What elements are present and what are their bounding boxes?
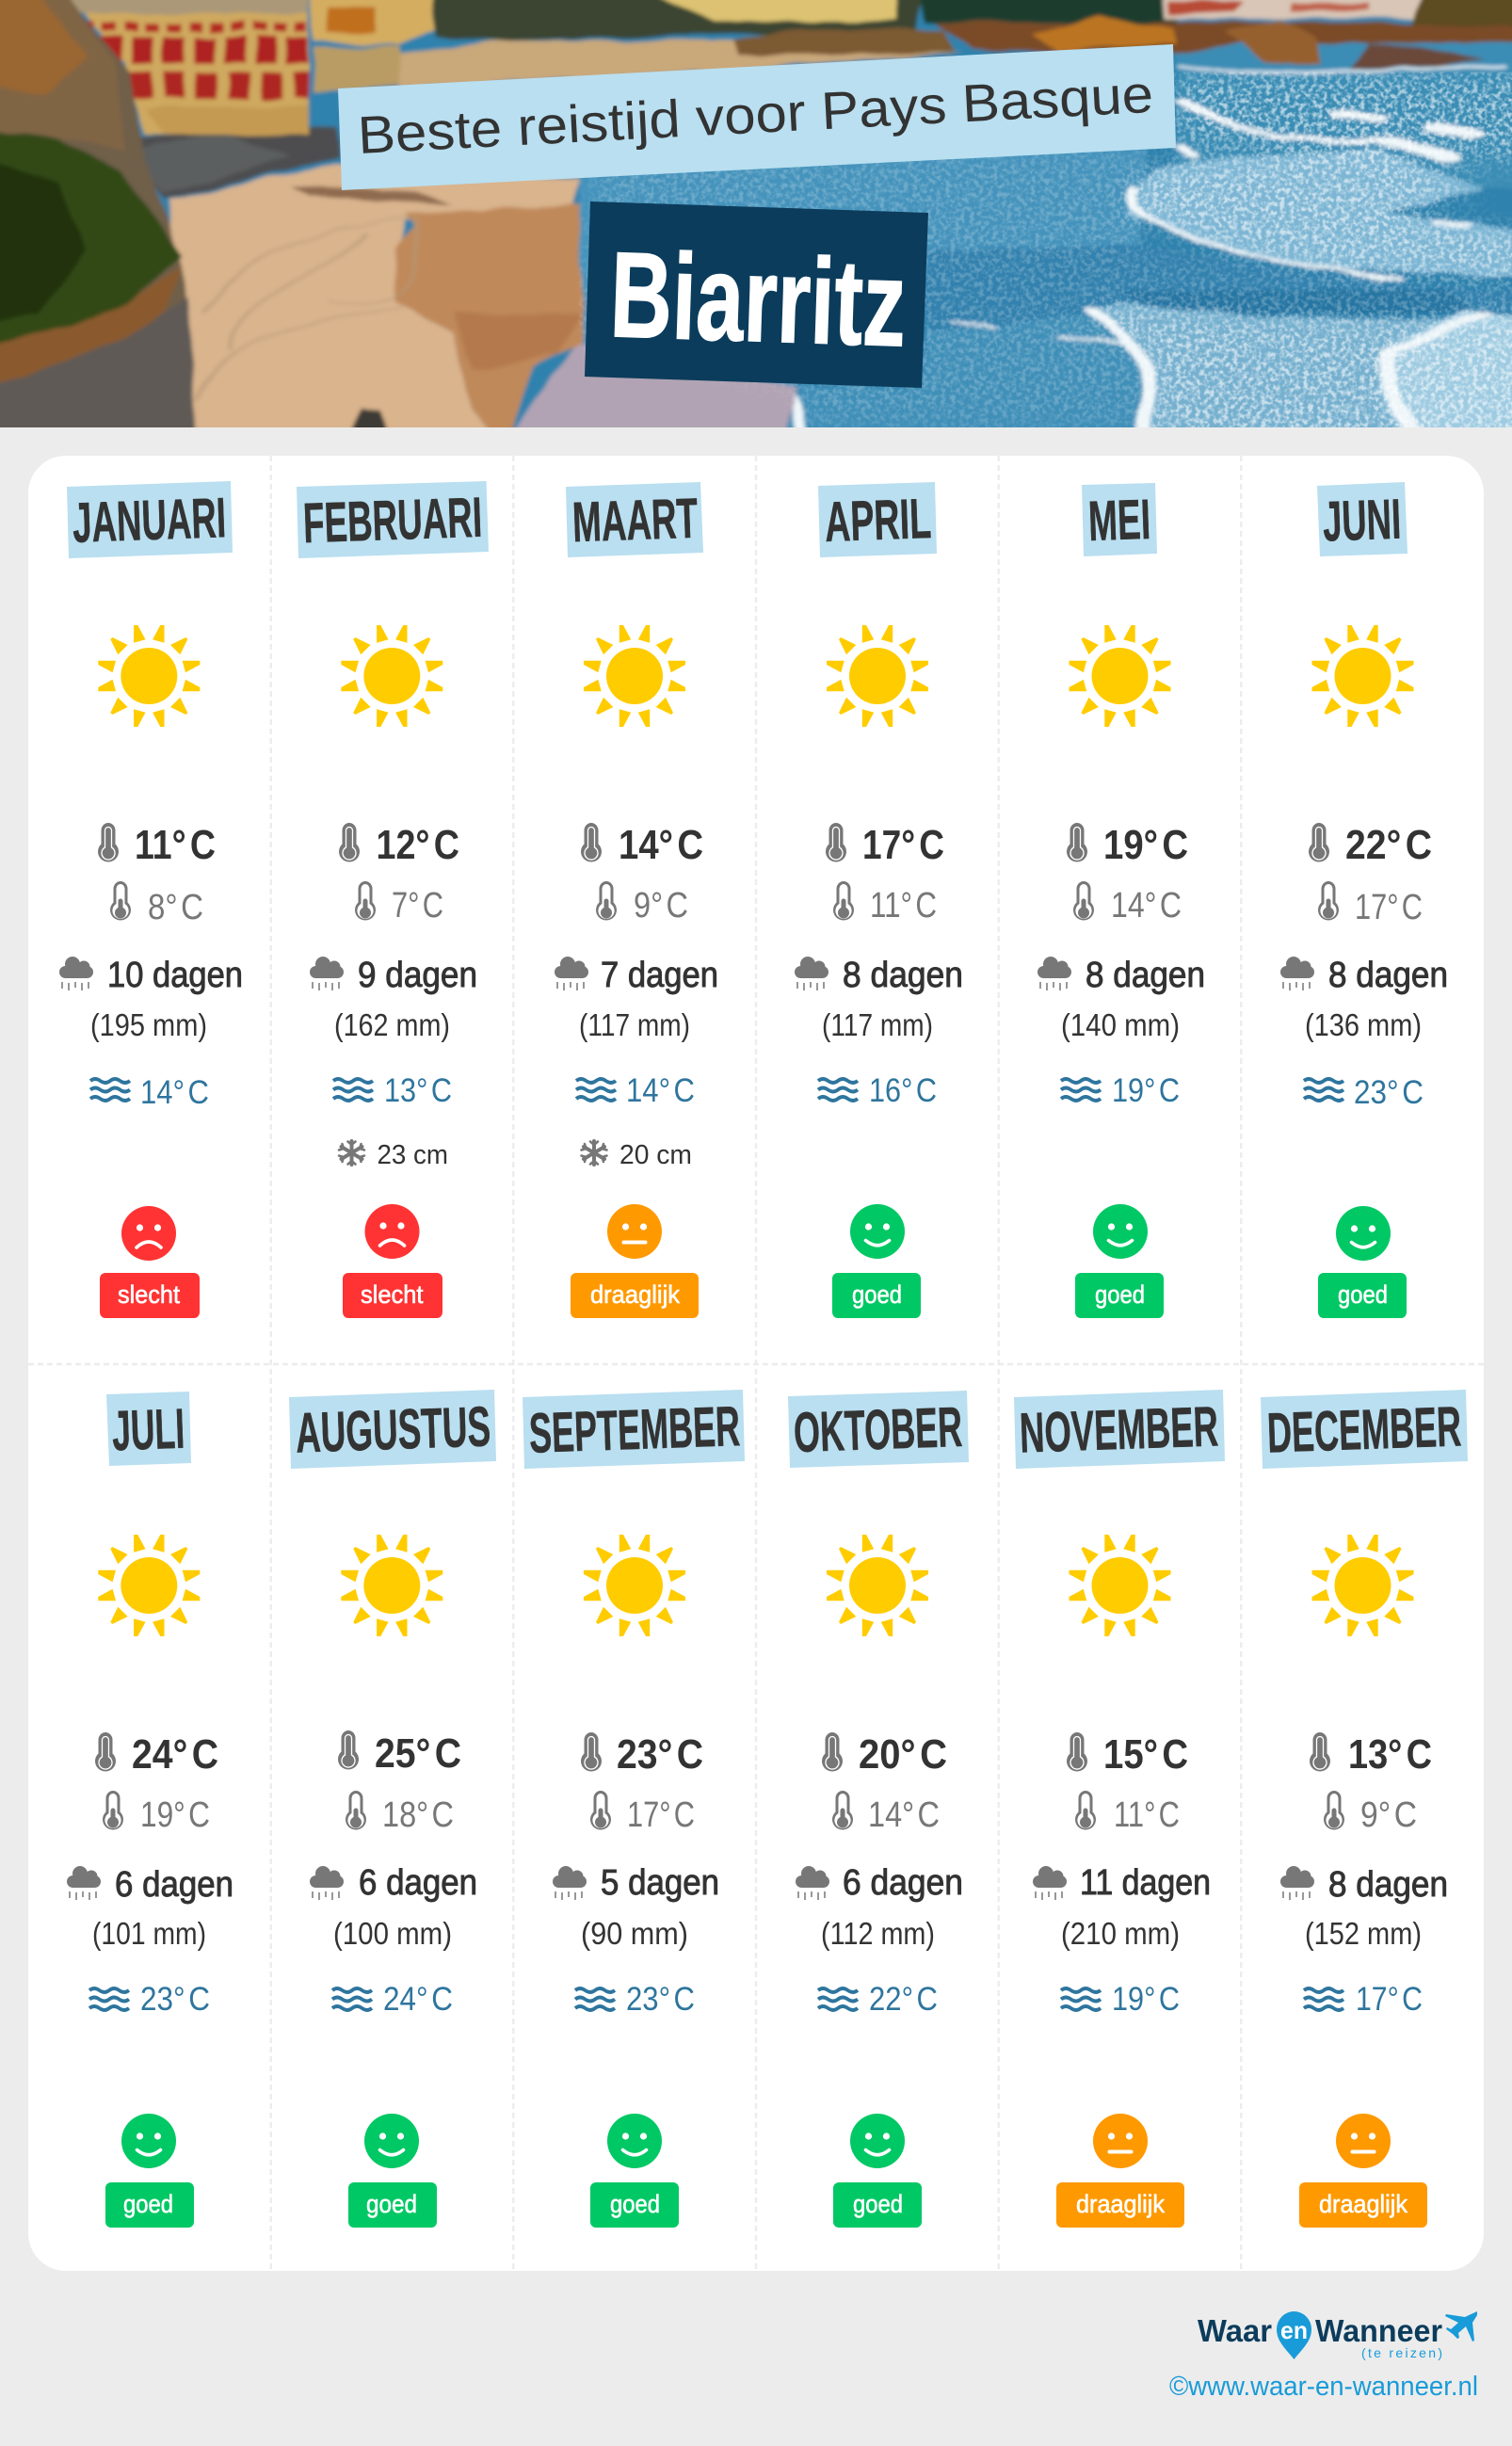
sea temperature: 23°C: [626, 1981, 695, 2018]
max temperature: 20°C: [859, 1731, 947, 1778]
panel: monthly climate table: [28, 456, 1484, 2271]
max temperature: [822, 1731, 947, 1778]
max temperature: 14°C: [619, 822, 703, 868]
icon: good rating: [364, 2114, 419, 2168]
icon: sun: [584, 1535, 685, 1636]
min temperature: [590, 1791, 695, 1835]
icon: good rating: [607, 2114, 662, 2168]
sea temperature: [89, 1981, 210, 2018]
rating badge: [343, 1273, 442, 1318]
min temperature: 8°C: [148, 888, 203, 927]
icon: fair rating: [1093, 2114, 1148, 2168]
logo: Waar en Wanneer: (te reizen): [1361, 2345, 1442, 2360]
rain days: [1037, 956, 1205, 995]
min temperature: [833, 881, 937, 925]
month column: juli: [67, 1392, 233, 2228]
max temperature: [1067, 822, 1188, 868]
rating badge: [571, 1273, 699, 1318]
min temperature: 9°C: [634, 886, 688, 925]
month label: juli: JULI: [111, 1397, 185, 1462]
icon: sun: [1070, 625, 1171, 727]
rainfall amount: (152 mm): [1305, 1916, 1422, 1951]
min temperature: [103, 1791, 210, 1835]
month column: juni: [1280, 482, 1448, 1318]
month label: januari: [67, 481, 233, 558]
rating badge: goed: [366, 2190, 417, 2218]
max temperature: [1067, 1731, 1188, 1778]
rating badge: draaglijk: [590, 1280, 680, 1309]
sea temperature: 14°C: [626, 1072, 695, 1109]
rain days: [1033, 1863, 1211, 1903]
min temperature: [1075, 1791, 1180, 1835]
month label: februari: FEBRUARI: [302, 486, 483, 555]
icon: sun: [827, 625, 928, 727]
min temperature: [355, 881, 443, 925]
rain days: [795, 956, 963, 995]
max temperature: 19°C: [1103, 822, 1188, 868]
rating badge: draaglijk: [1076, 2190, 1165, 2218]
rating badge: [833, 2182, 922, 2228]
month column: april: [795, 482, 963, 1318]
max temperature: [339, 822, 459, 868]
month label: juli: [106, 1392, 191, 1466]
snowfall: 20 cm: [619, 1140, 692, 1170]
icon: sun: [827, 1535, 928, 1636]
rating badge: goed: [123, 2190, 173, 2218]
rating badge: [1299, 2182, 1427, 2228]
rating badge: slecht: [118, 1280, 180, 1309]
month column: november: [1014, 1390, 1225, 2228]
max temperature: 15°C: [1103, 1731, 1188, 1778]
sea temperature: 16°C: [869, 1072, 937, 1109]
min temperature: [832, 1791, 940, 1835]
icon: bad rating: [365, 1204, 420, 1259]
sea temperature: [818, 1072, 937, 1109]
month label: november: [1014, 1390, 1225, 1469]
month column: januari: [59, 481, 243, 1318]
month label: mei: MEI: [1087, 488, 1151, 553]
month column: mei: [1037, 483, 1205, 1318]
max temperature: [826, 822, 944, 868]
max temperature: 17°C: [862, 822, 944, 868]
rain days: [310, 956, 477, 995]
rain days: 9 dagen: [358, 956, 477, 995]
rating badge: [590, 2182, 679, 2228]
rating badge: goed: [1338, 1280, 1388, 1309]
rainfall amount: (117 mm): [822, 1007, 933, 1042]
icon: sun: [1312, 1535, 1414, 1636]
max temperature: 11°C: [135, 822, 216, 868]
month label: oktober: [788, 1391, 969, 1468]
rating badge: goed: [852, 1280, 902, 1309]
max temperature: [98, 822, 216, 868]
month label: september: [523, 1390, 745, 1469]
rain days: [310, 1863, 477, 1903]
sea temperature: [1304, 1074, 1424, 1111]
month label: november: NOVEMBER: [1019, 1394, 1219, 1465]
sea temperature: 22°C: [869, 1981, 938, 2018]
min temperature: 9°C: [1360, 1795, 1417, 1835]
rating badge: [100, 1273, 200, 1318]
header banner: subtitle: Beste reistijd voor Pays Basque: [356, 64, 1154, 165]
sea temperature: [1061, 1981, 1180, 2018]
rain days: 7 dagen: [601, 956, 718, 995]
sea temperature: 14°C: [140, 1074, 209, 1111]
sea temperature: 17°C: [1356, 1981, 1423, 2018]
month column: december: [1261, 1390, 1468, 2228]
month column: maart: [555, 482, 718, 1318]
month label: mei: [1082, 483, 1157, 556]
rating badge: goed: [1095, 1280, 1145, 1309]
month label: augustus: [289, 1390, 496, 1469]
sea temperature: 23°C: [1354, 1074, 1424, 1111]
max temperature: 23°C: [617, 1731, 703, 1778]
icon: good rating: [850, 2114, 905, 2168]
min temperature: [110, 881, 203, 927]
min temperature: 18°C: [382, 1795, 454, 1835]
icon: sun: [98, 1535, 200, 1636]
month label: april: [818, 482, 937, 557]
month label: januari: JANUARI: [72, 486, 227, 555]
rain days: 8 dagen: [1328, 1865, 1448, 1905]
max temperature: [581, 822, 703, 868]
sea temperature: 23°C: [140, 1981, 210, 2018]
sea temperature: 19°C: [1112, 1981, 1180, 2018]
sea temperature: [1061, 1072, 1180, 1109]
rain days: [59, 956, 243, 995]
sea temperature: [818, 1981, 938, 2018]
rating badge: [1075, 1273, 1164, 1318]
max temperature: 13°C: [1348, 1731, 1432, 1778]
icon: fair rating: [1336, 2114, 1391, 2168]
rating badge: [1056, 2182, 1184, 2228]
month label: maart: [566, 482, 703, 557]
rating badge: slecht: [361, 1280, 424, 1309]
min temperature: 11°C: [870, 886, 937, 925]
sea temperature: [333, 1072, 452, 1109]
rain days: 8 dagen: [1328, 956, 1448, 995]
max temperature: [581, 1731, 703, 1778]
max temperature: 24°C: [132, 1731, 218, 1778]
icon: sun: [584, 625, 685, 727]
rainfall amount: (136 mm): [1305, 1007, 1422, 1042]
rating badge: goed: [853, 2190, 903, 2218]
min temperature: 7°C: [392, 886, 443, 925]
header photo: Biarritz beach and coast: [0, 0, 1512, 427]
max temperature: 25°C: [375, 1730, 461, 1777]
month label: februari: [297, 481, 489, 558]
rainfall amount: (100 mm): [333, 1916, 452, 1951]
rainfall amount: (90 mm): [581, 1916, 688, 1951]
max temperature: 12°C: [377, 822, 459, 868]
sea temperature: [576, 1072, 695, 1109]
rating badge: goed: [610, 2190, 660, 2218]
max temperature: [95, 1731, 218, 1778]
rain days: 11 dagen: [1080, 1863, 1211, 1903]
logo: Waar en Wanneer: Waar: [1198, 2313, 1272, 2348]
logo: Waar en Wanneer: [1198, 2311, 1477, 2360]
icon: sun: [1070, 1535, 1171, 1636]
logo: Waar en Wanneer: Wanneer: [1315, 2313, 1442, 2348]
snowfall: [582, 1140, 692, 1170]
min temperature: 19°C: [140, 1795, 210, 1835]
snowfall: [339, 1140, 448, 1170]
min temperature: [1318, 881, 1423, 927]
min temperature: 11°C: [1114, 1795, 1180, 1835]
min temperature: [346, 1791, 454, 1835]
month label: augustus: AUGUSTUS: [295, 1394, 491, 1465]
month label: april: APRIL: [824, 487, 932, 554]
rain days: 6 dagen: [359, 1863, 477, 1903]
min temperature: [596, 881, 688, 925]
rain days: [553, 1863, 719, 1903]
icon: good rating: [1336, 1206, 1391, 1261]
header banner: city name: Biarritz: [608, 227, 909, 372]
rain days: 8 dagen: [843, 956, 963, 995]
max temperature: [338, 1730, 461, 1777]
month column: augustus: [289, 1390, 496, 2228]
month label: juni: JUNI: [1322, 488, 1402, 553]
icon: map pin: en: [1280, 2316, 1308, 2344]
sea temperature: [332, 1981, 453, 2018]
min temperature: 17°C: [1355, 888, 1423, 927]
month label: maart: MAART: [571, 487, 699, 554]
icon: plane: [1445, 2311, 1477, 2341]
icon: good rating: [1093, 1204, 1148, 1259]
min temperature: [1324, 1791, 1417, 1835]
min temperature: 14°C: [1111, 886, 1182, 925]
rainfall amount: (162 mm): [334, 1007, 450, 1042]
icon: bad rating: [121, 1206, 176, 1261]
rainfall amount: (101 mm): [92, 1916, 206, 1951]
min temperature: [1073, 881, 1182, 925]
rainfall amount: (210 mm): [1061, 1916, 1180, 1951]
icon: sun: [341, 625, 442, 727]
icon: fair rating: [607, 1204, 662, 1259]
month column: februari: [297, 481, 489, 1318]
rain days: 6 dagen: [843, 1863, 963, 1903]
sea temperature: [90, 1074, 209, 1111]
rain days: [555, 956, 718, 995]
month label: juni: [1317, 482, 1407, 556]
sea temperature: 24°C: [383, 1981, 453, 2018]
rainfall amount: (117 mm): [579, 1007, 690, 1042]
icon: sun: [1312, 625, 1414, 727]
month column: oktober: [788, 1391, 969, 2228]
rain days: 10 dagen: [107, 956, 243, 995]
header banner: city name: [585, 201, 928, 388]
rain days: [796, 1863, 963, 1903]
icon: good rating: [850, 1204, 905, 1259]
rainfall amount: (112 mm): [821, 1916, 935, 1951]
min temperature: 14°C: [868, 1795, 940, 1835]
month column: september: [523, 1390, 745, 2228]
max temperature: [1310, 1731, 1432, 1778]
sea temperature: [575, 1981, 695, 2018]
month label: september: SEPTEMBER: [528, 1394, 741, 1465]
website credit: ©www.waar-en-wanneer.nl: [1169, 2372, 1478, 2402]
rain days: 5 dagen: [601, 1863, 719, 1903]
rainfall amount: (195 mm): [90, 1007, 207, 1042]
rainfall amount: (140 mm): [1061, 1007, 1180, 1042]
rain days: 8 dagen: [1086, 956, 1205, 995]
month label: oktober: OKTOBER: [793, 1395, 963, 1464]
min temperature: 17°C: [627, 1795, 695, 1835]
icon: sun: [98, 625, 200, 727]
max temperature: 22°C: [1345, 822, 1432, 868]
header banner: subtitle: [338, 44, 1176, 190]
sea temperature: 13°C: [384, 1072, 452, 1109]
sea temperature: [1304, 1981, 1423, 2018]
rating badge: [832, 1273, 921, 1318]
rain days: [67, 1865, 233, 1905]
icon: sun: [341, 1535, 442, 1636]
icon: map pin: [1277, 2311, 1311, 2359]
icon: good rating: [121, 2114, 176, 2168]
rating badge: [348, 2182, 437, 2228]
rating badge: [1318, 1273, 1407, 1318]
rain days: [1280, 1865, 1448, 1905]
rain days: 6 dagen: [115, 1865, 233, 1905]
rating badge: [105, 2182, 194, 2228]
sea temperature: 19°C: [1112, 1072, 1180, 1109]
snowfall: 23 cm: [377, 1140, 448, 1170]
rating badge: draaglijk: [1319, 2190, 1407, 2218]
max temperature: [1309, 822, 1432, 868]
rain days: [1280, 956, 1448, 995]
